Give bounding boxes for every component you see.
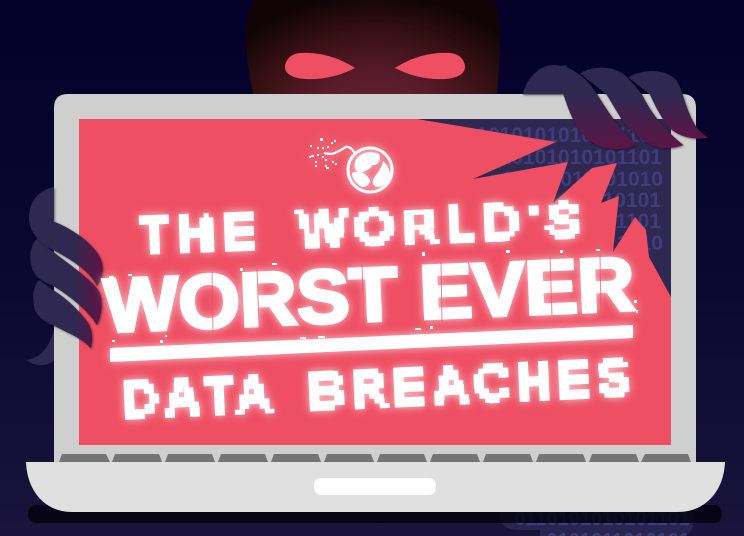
binary code on screen: 1010101 bbox=[579, 189, 661, 212]
fuse bbox=[324, 147, 356, 155]
underline bar bbox=[110, 325, 633, 362]
laptop bbox=[26, 94, 725, 512]
binary code on screen: 10101010101101 bbox=[500, 146, 662, 169]
hand back parts behind the laptop bbox=[26, 65, 585, 365]
distressed specks bbox=[109, 249, 638, 343]
screen damaged panel bbox=[79, 119, 671, 445]
icon: left eye bbox=[285, 53, 355, 79]
laptop base bbox=[26, 462, 725, 512]
bezel slivers between fingers bbox=[599, 95, 665, 119]
finger: back bbox=[628, 71, 708, 139]
binary code on screen: 1001101 bbox=[580, 210, 661, 233]
finger: lower bbox=[33, 280, 92, 348]
binary code on screen bbox=[476, 124, 663, 255]
binary code on screen: 11010 bbox=[606, 232, 663, 255]
finger: upper bbox=[29, 187, 103, 286]
trackpad bbox=[314, 478, 436, 495]
left hand fingers bbox=[29, 187, 103, 348]
binary code behind the laptop: 0110101010101101 bbox=[514, 508, 690, 530]
heading line: WORST EVER: WORST EVER bbox=[102, 242, 636, 349]
stencil cuts and scratches bbox=[212, 254, 601, 332]
binary code on screen: 10101011101010 bbox=[502, 168, 663, 191]
finger: middle bbox=[580, 68, 683, 148]
icon: globe bomb bbox=[309, 138, 392, 192]
icon: right eye bbox=[395, 53, 465, 79]
title block bbox=[102, 138, 638, 428]
binary code on screen: 1010101010101101 bbox=[476, 124, 662, 147]
right hand fingers bbox=[523, 65, 708, 149]
screen red torn surface bbox=[79, 119, 671, 445]
laptop lid bezel bbox=[54, 94, 696, 463]
heading line: THE WORLD'S: THE WORLD'S bbox=[137, 194, 588, 263]
finger: front bbox=[523, 65, 637, 149]
globe bbox=[348, 148, 392, 192]
keyboard keys bbox=[59, 454, 691, 462]
laptop shadow bbox=[28, 505, 722, 523]
hacker head bbox=[246, 0, 500, 94]
finger: middle bbox=[30, 238, 102, 325]
spark dots bbox=[309, 138, 337, 169]
binary code behind the laptop bbox=[500, 505, 693, 536]
heading line: DATA BREACHES: DATA BREACHES bbox=[121, 348, 638, 428]
